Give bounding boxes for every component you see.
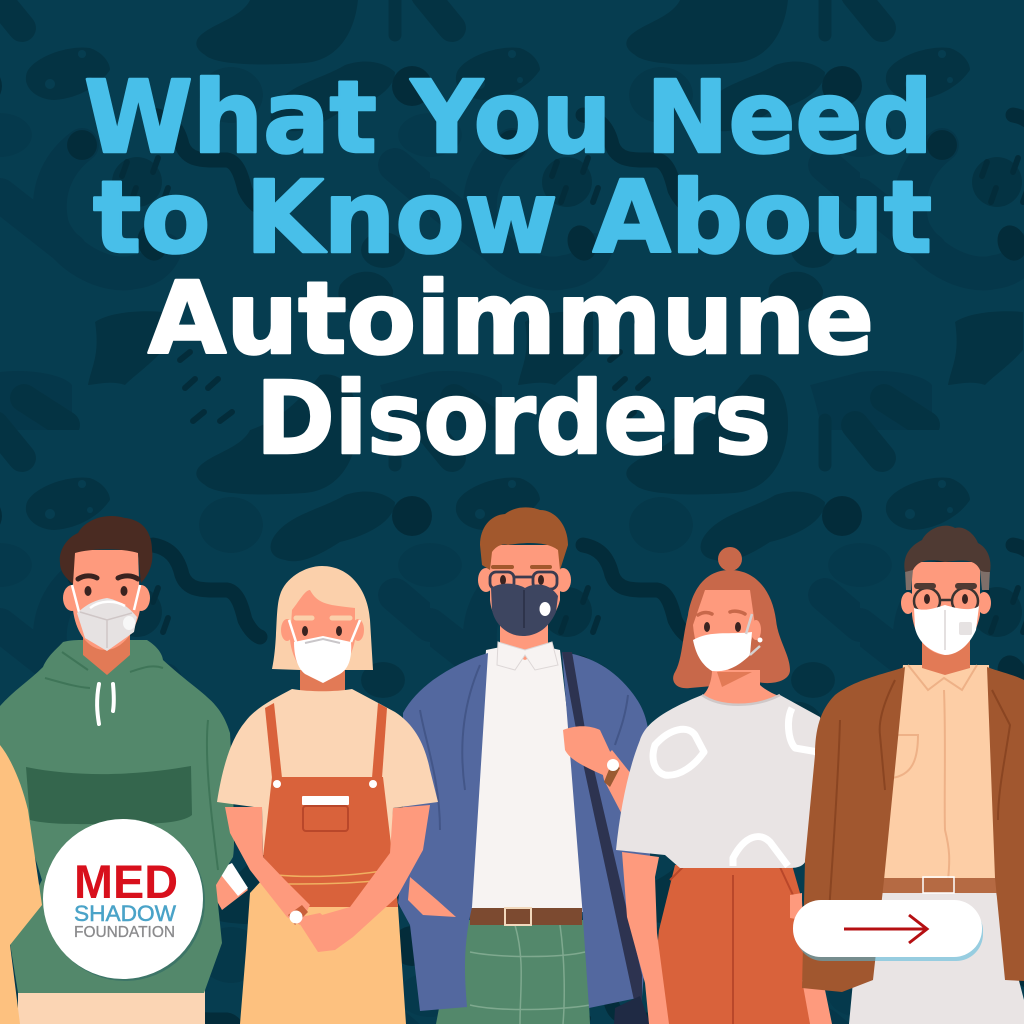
white mask: [914, 605, 979, 655]
overall waist band: [277, 871, 382, 884]
arms and clasped hands: [225, 805, 430, 952]
glasses: [490, 572, 557, 589]
green pants: [436, 920, 590, 1024]
title line: What You Need: What You Need: [84, 59, 933, 176]
shirt: [882, 665, 997, 880]
trouser seams: [670, 862, 793, 1024]
ears: [478, 568, 571, 592]
eyes and brows: [914, 583, 977, 604]
mask: [72, 585, 140, 651]
jacket: [802, 667, 1024, 992]
neck shadow: [717, 672, 752, 687]
overall straps: [265, 703, 387, 778]
logo word FOUNDATION: FOUNDATION: [74, 924, 175, 941]
face: [290, 590, 355, 680]
title line: Autoimmune: Autoimmune: [148, 260, 874, 377]
arrow icon: [844, 915, 927, 943]
ears: [901, 592, 991, 614]
yellow skirt: [240, 880, 406, 1024]
ears: [281, 619, 364, 641]
overalls: [263, 777, 398, 907]
face: [912, 562, 980, 655]
white mask: [289, 620, 360, 683]
pants plaid lines: [470, 925, 590, 1024]
person: woman with red hair and grey tee: [616, 547, 832, 1024]
grey tee: [616, 695, 823, 868]
hand behind button: [790, 893, 802, 920]
tee neckline: [702, 695, 780, 705]
title line: to Know About: to Know About: [93, 159, 932, 276]
face: [490, 545, 560, 635]
hoodie: [0, 640, 234, 993]
logo word MED: MED: [74, 855, 178, 908]
jacket fold lines: [828, 680, 1010, 930]
person: woman with blonde bob and overalls: [217, 566, 438, 1024]
title: [84, 59, 933, 477]
logo badge: MedShadow Foundation: [43, 819, 205, 981]
jacket fold lines: [420, 665, 628, 830]
pants: [18, 985, 205, 1024]
dark mask: [491, 584, 558, 636]
person: man in green hoodie: [0, 516, 248, 1024]
bib pocket: [302, 796, 349, 831]
watch: [288, 905, 308, 925]
neck: [300, 660, 345, 705]
arm and hand: [563, 726, 632, 822]
bag bottom: [614, 996, 650, 1024]
white surgical mask: [693, 614, 762, 671]
eyes and brows: [698, 611, 745, 632]
overall buttons: [273, 780, 377, 788]
face: [73, 550, 140, 650]
hand in pocket: [408, 877, 456, 917]
neck: [83, 630, 130, 675]
belt buckle: [505, 908, 531, 925]
hand and cuff: [205, 863, 248, 910]
side stubble: [905, 570, 990, 590]
belt: [882, 877, 998, 893]
belt: [470, 908, 582, 925]
neck: [500, 620, 548, 660]
ear: [751, 620, 761, 640]
face: [693, 590, 755, 672]
tee: [217, 689, 438, 855]
ears: [63, 585, 150, 611]
hair: [904, 526, 990, 572]
hoodie drawstrings: [97, 684, 114, 724]
brows and eyes: [78, 576, 138, 596]
hair: [480, 507, 568, 570]
logo word SHADOW: SHADOW: [74, 901, 176, 926]
next button with arrow: [793, 900, 983, 961]
hair: [673, 547, 790, 688]
neck: [700, 670, 782, 705]
eyes and brows: [493, 567, 550, 585]
bare arms: [622, 852, 832, 1024]
grey trousers: [849, 888, 1024, 1024]
white shirt: [468, 642, 590, 912]
person: man in brown jacket: [790, 526, 1024, 1024]
jacket: [398, 652, 650, 1011]
shoulder strap: [562, 652, 642, 1005]
orange trousers: [650, 865, 810, 1024]
shirt placket and pocket: [892, 665, 977, 880]
shirt collar: [497, 642, 558, 670]
hair: [60, 516, 152, 584]
hoodie pocket band: [26, 766, 192, 824]
brows and eyes: [296, 618, 350, 636]
title line: Disorders: Disorders: [256, 360, 771, 477]
hoodie fold lines: [45, 652, 218, 870]
round glasses: [914, 588, 978, 614]
tee ring motifs: [653, 708, 818, 866]
neck: [922, 640, 970, 675]
person: partly visible figure at left edge: [0, 745, 42, 1024]
person: man in blue jacket: [398, 507, 650, 1024]
hair back: [272, 566, 373, 670]
